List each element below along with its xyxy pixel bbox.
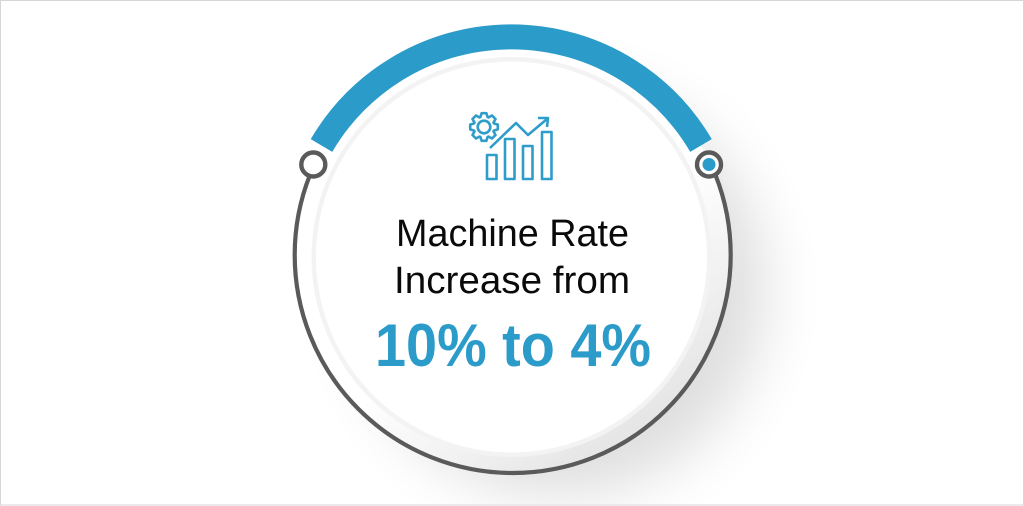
inner white disc <box>316 62 707 452</box>
drop shadow <box>404 116 782 504</box>
gear <box>470 113 498 141</box>
bars <box>487 132 552 179</box>
value: 10% to 4% <box>375 312 651 379</box>
trend arrow <box>490 119 547 148</box>
panel: circular gauge <box>295 37 731 473</box>
gauge base with soft inner band <box>408 217 728 471</box>
heading: Machine Rate <box>396 213 629 255</box>
heading: Increase from <box>394 260 630 302</box>
heading <box>394 213 630 302</box>
right knob <box>697 152 721 176</box>
outer grey ring <box>292 176 733 476</box>
icon: gear and rising bar chart <box>470 113 552 179</box>
left knob <box>301 152 325 176</box>
blue progress arc <box>322 37 701 146</box>
inner disc rim <box>312 57 712 457</box>
top white backing <box>295 37 731 473</box>
